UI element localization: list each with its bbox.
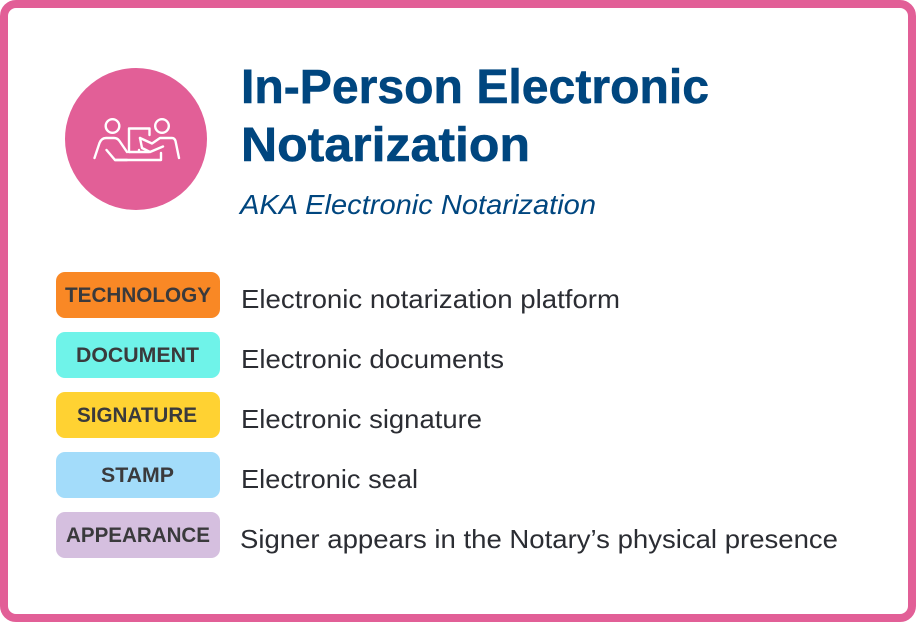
badge: document xyxy=(56,332,220,378)
title xyxy=(241,61,709,172)
badge: document: DOCUMENT xyxy=(76,344,199,367)
title: In-Person Electronic xyxy=(241,61,709,114)
badge: signature: SIGNATURE xyxy=(77,404,197,427)
text: technology description: Electronic notarization platform xyxy=(241,284,620,314)
icon: people at electronic notarization table xyxy=(65,68,207,210)
badge: stamp: STAMP xyxy=(101,464,174,487)
text: document description: Electronic documents xyxy=(241,344,504,374)
subtitle: AKA Electronic Notarization xyxy=(238,189,596,220)
badge: appearance: APPEARANCE xyxy=(66,524,210,547)
text: stamp description: Electronic seal xyxy=(241,464,418,494)
badge: technology: TECHNOLOGY xyxy=(65,284,211,307)
badge: stamp xyxy=(56,452,220,498)
row: technology xyxy=(56,272,620,318)
row: signature xyxy=(56,392,482,438)
text: signature description: Electronic signature xyxy=(241,404,482,434)
row: appearance xyxy=(56,512,838,558)
title: Notarization xyxy=(241,119,530,172)
text: appearance description: Signer appears in the Notary’s physical presence xyxy=(240,524,838,554)
row: document xyxy=(56,332,504,378)
badge: appearance xyxy=(56,512,220,558)
row: stamp xyxy=(56,452,418,498)
badge: signature xyxy=(56,392,220,438)
badge: technology xyxy=(56,272,220,318)
